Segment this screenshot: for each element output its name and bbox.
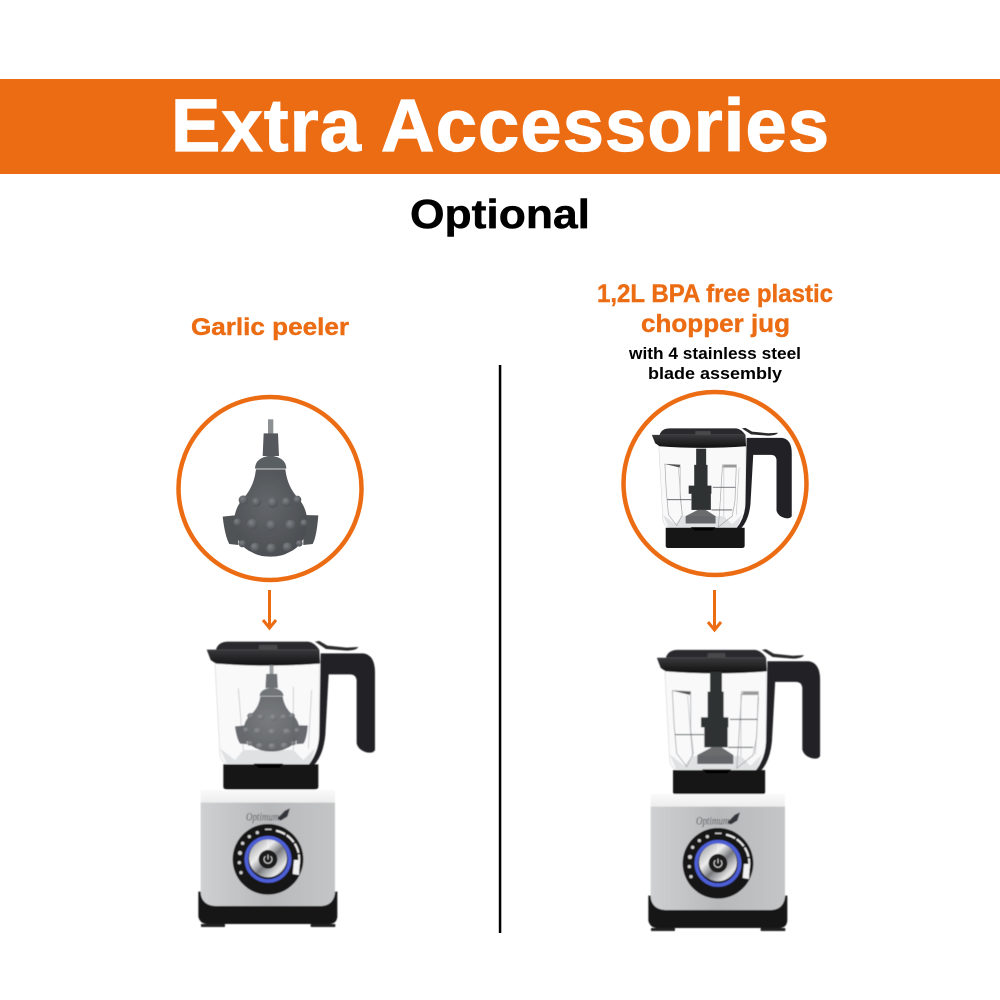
heading: chopper jug: 1,2L BPA free plastic — [597, 280, 833, 308]
heading: garlic peeler: Garlic peeler — [191, 314, 349, 341]
panel: chopper jug — [597, 280, 833, 931]
subtitle: Optional — [410, 191, 590, 237]
blender with chopper jug — [648, 649, 820, 931]
panel: garlic peeler — [178, 314, 375, 927]
description text: blade assembly — [648, 364, 783, 383]
icon: chopper jug in circle — [624, 392, 806, 575]
title: Extra Accessories — [171, 84, 829, 167]
divider line — [499, 365, 501, 933]
blender with garlic peeler — [198, 641, 375, 927]
description text — [628, 344, 801, 383]
title banner — [0, 79, 1000, 174]
arrow: peeler to blender — [263, 590, 276, 628]
description text: with 4 stainless steel — [628, 344, 801, 363]
icon: garlic peeler in circle — [178, 397, 362, 580]
arrow: jug to blender — [708, 590, 721, 630]
heading: chopper jug — [597, 280, 833, 338]
heading: chopper jug: chopper jug — [641, 310, 790, 338]
